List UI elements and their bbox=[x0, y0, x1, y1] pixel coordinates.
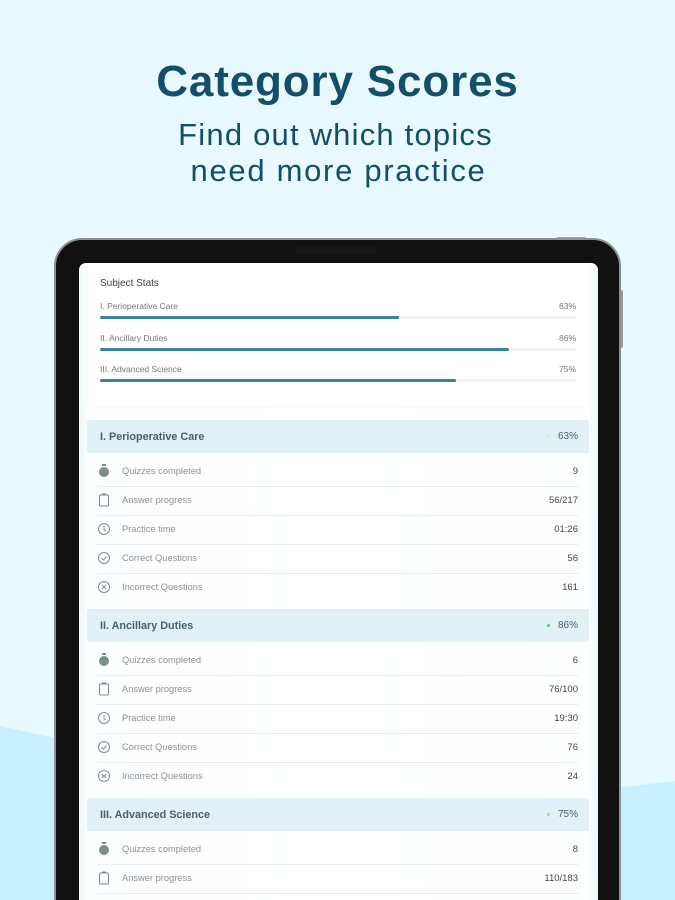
row: correct 1 bbox=[97, 552, 578, 574]
row: time 1: 01:26 bbox=[554, 524, 578, 535]
row: quizzes 2: Quizzes completed bbox=[122, 655, 201, 665]
stat: advanced: 75% bbox=[559, 364, 576, 374]
section header: advanced bbox=[87, 798, 589, 831]
section header: perioperative: 63% bbox=[558, 431, 578, 442]
title: Category Scores bbox=[156, 57, 519, 106]
row: quizzes 2: 6 bbox=[573, 655, 578, 666]
row: incorrect 2: Incorrect Questions bbox=[122, 771, 203, 781]
row: quizzes 1: 9 bbox=[573, 466, 578, 477]
row: quizzes 2 bbox=[97, 653, 578, 676]
section header: perioperative: I. Perioperative Care bbox=[100, 431, 204, 443]
stat: advanced bbox=[100, 364, 576, 382]
subtitle line 2: need more practice bbox=[191, 153, 486, 188]
section header: ancillary: 86% bbox=[558, 620, 578, 631]
section header: perioperative bbox=[87, 420, 589, 453]
row: time 1: Practice time bbox=[122, 524, 176, 534]
row: correct 2: 76 bbox=[567, 742, 578, 753]
row: answers 3: Answer progress bbox=[122, 873, 192, 883]
tablet frame bbox=[54, 238, 621, 900]
row: incorrect 1: Incorrect Questions bbox=[122, 582, 203, 592]
row: quizzes 3: 8 bbox=[573, 844, 578, 855]
row: answers 1: 56/217 bbox=[549, 495, 578, 506]
stat: perioperative: 63% bbox=[559, 301, 576, 311]
row: time 2 bbox=[97, 712, 578, 734]
row: answers 1 bbox=[97, 494, 578, 516]
row: time 2: Practice time bbox=[122, 713, 176, 723]
stat: advanced: III. Advanced Science bbox=[100, 364, 182, 374]
row: time 1 bbox=[97, 523, 578, 545]
section header: advanced: III. Advanced Science bbox=[100, 809, 210, 821]
row: answers 2: 76/100 bbox=[549, 684, 578, 695]
row: time 2: 19:30 bbox=[554, 713, 578, 724]
row: quizzes 1 bbox=[97, 464, 578, 487]
subtitle line 1: Find out which topics bbox=[178, 117, 493, 152]
row: incorrect 2 bbox=[98, 770, 578, 782]
row: answers 2: Answer progress bbox=[122, 684, 192, 694]
row: answers 2 bbox=[97, 682, 578, 705]
row: correct 1: 56 bbox=[567, 553, 578, 564]
side buttons bbox=[619, 290, 623, 348]
row: incorrect 1 bbox=[98, 581, 578, 593]
stat: perioperative bbox=[100, 301, 576, 319]
tablet screen bbox=[79, 263, 598, 900]
camera bbox=[296, 246, 376, 254]
row: quizzes 1: Quizzes completed bbox=[122, 466, 201, 476]
row: answers 3 bbox=[97, 872, 578, 894]
row: quizzes 3 bbox=[97, 842, 578, 865]
section header: ancillary: II. Ancillary Duties bbox=[100, 620, 193, 632]
section header: advanced: 75% bbox=[558, 809, 578, 820]
top button bbox=[556, 237, 586, 241]
row: correct 2: Correct Questions bbox=[122, 742, 197, 752]
stat: ancillary: 86% bbox=[559, 333, 576, 343]
stat: ancillary: II. Ancillary Duties bbox=[100, 333, 168, 343]
panel heading: Subject Stats bbox=[100, 278, 159, 289]
row: answers 3: 110/183 bbox=[544, 873, 578, 884]
stat: ancillary bbox=[100, 333, 576, 351]
row: incorrect 1: 161 bbox=[562, 582, 578, 593]
stat: perioperative: I. Perioperative Care bbox=[100, 301, 178, 311]
row: quizzes 3: Quizzes completed bbox=[122, 844, 201, 854]
row: correct 2 bbox=[97, 741, 578, 763]
row: incorrect 2: 24 bbox=[567, 771, 578, 782]
row: answers 1: Answer progress bbox=[122, 495, 192, 505]
section header: ancillary bbox=[87, 609, 589, 642]
row: correct 1: Correct Questions bbox=[122, 553, 197, 563]
panel: subject stats bbox=[88, 263, 588, 407]
